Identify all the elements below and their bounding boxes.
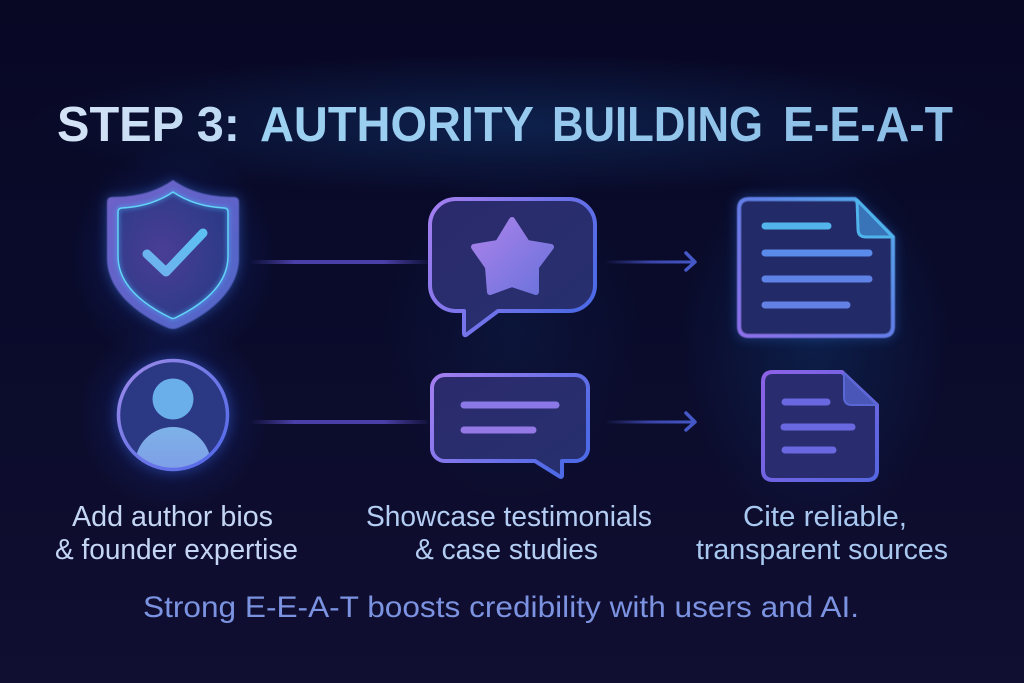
arrow: row 1 (605, 253, 695, 270)
label: testimonials (366, 501, 652, 566)
fold corner (844, 373, 877, 405)
connector line: row 2 left (250, 420, 428, 424)
document text lines (765, 226, 869, 305)
icon: star (474, 220, 551, 292)
icon: speech bubble with lines (432, 375, 588, 477)
label: sources (696, 501, 948, 566)
icon: person avatar (115, 357, 231, 503)
label: author bios (55, 501, 298, 566)
fold corner (857, 200, 893, 237)
icon: speech bubble with star (430, 199, 595, 335)
footer statement: Strong E-E-A-T boosts credibility with users and AI. (143, 591, 859, 624)
label: testimonials: & case studies (415, 534, 598, 566)
label: sources: Cite reliable, (743, 501, 907, 533)
icon: shield with check mark (107, 180, 239, 329)
title: E-E-A-T (783, 98, 953, 152)
label: testimonials: Showcase testimonials (366, 501, 652, 533)
arrow: row 2 (605, 413, 695, 430)
bubble text lines (464, 405, 556, 430)
title: AUTHORITY (260, 98, 534, 152)
label: author bios: Add author bios (72, 501, 273, 533)
title: BUILDING (552, 98, 763, 152)
label: sources: transparent sources (696, 534, 948, 566)
icon: document small (763, 372, 877, 480)
document text lines (784, 402, 852, 450)
title: STEP 3: (57, 98, 240, 152)
title (57, 98, 953, 152)
label: author bios: & founder expertise (55, 534, 298, 566)
connector line: row 1 left (250, 260, 428, 264)
icon: document large (737, 197, 895, 338)
